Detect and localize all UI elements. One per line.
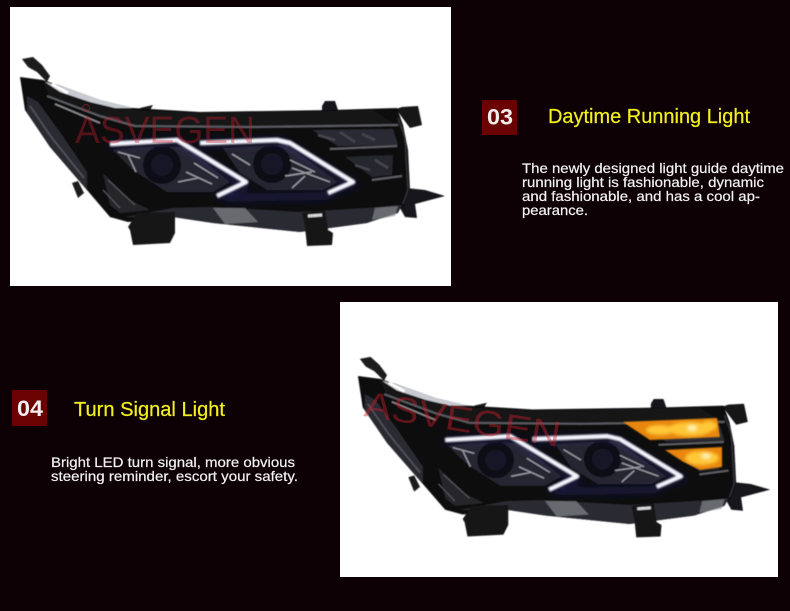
badge: 03: 03 (487, 104, 513, 130)
badge: 03 (482, 100, 517, 135)
badge: 04: 04 (17, 396, 44, 421)
text block: turn signal description (51, 454, 298, 484)
panel: turn signal light photo (340, 302, 778, 577)
lower amber turn signal (665, 447, 722, 470)
text block: daytime running light description: running light is fashionable, dynamic (522, 174, 764, 190)
heading: turn signal light: Turn Signal Light (74, 399, 225, 421)
headlamp with turn signal on (358, 357, 770, 537)
text block: turn signal description: Bright LED turn signal, more obvious (51, 454, 295, 470)
headlamp with daytime running light on (20, 57, 445, 246)
text block: turn signal description: steering reminder, escort your safety. (51, 468, 298, 484)
text block: daytime running light description (522, 160, 784, 218)
heading: daytime running light: Daytime Running Light (548, 106, 750, 128)
watermark: turn signal photo: ASVEGEN (362, 383, 564, 455)
badge: 04 (12, 390, 47, 426)
text block: daytime running light description: The newly designed light guide daytime (522, 160, 784, 176)
amber highlights (646, 421, 719, 465)
upper amber turn signal (623, 418, 720, 440)
panel: daytime running light photo (10, 7, 451, 286)
text block: daytime running light description: pearance. (522, 202, 588, 218)
watermark: daytime photo: ASVEGEN (75, 110, 255, 152)
text block: daytime running light description: and fashionable, and has a cool ap- (522, 188, 760, 204)
